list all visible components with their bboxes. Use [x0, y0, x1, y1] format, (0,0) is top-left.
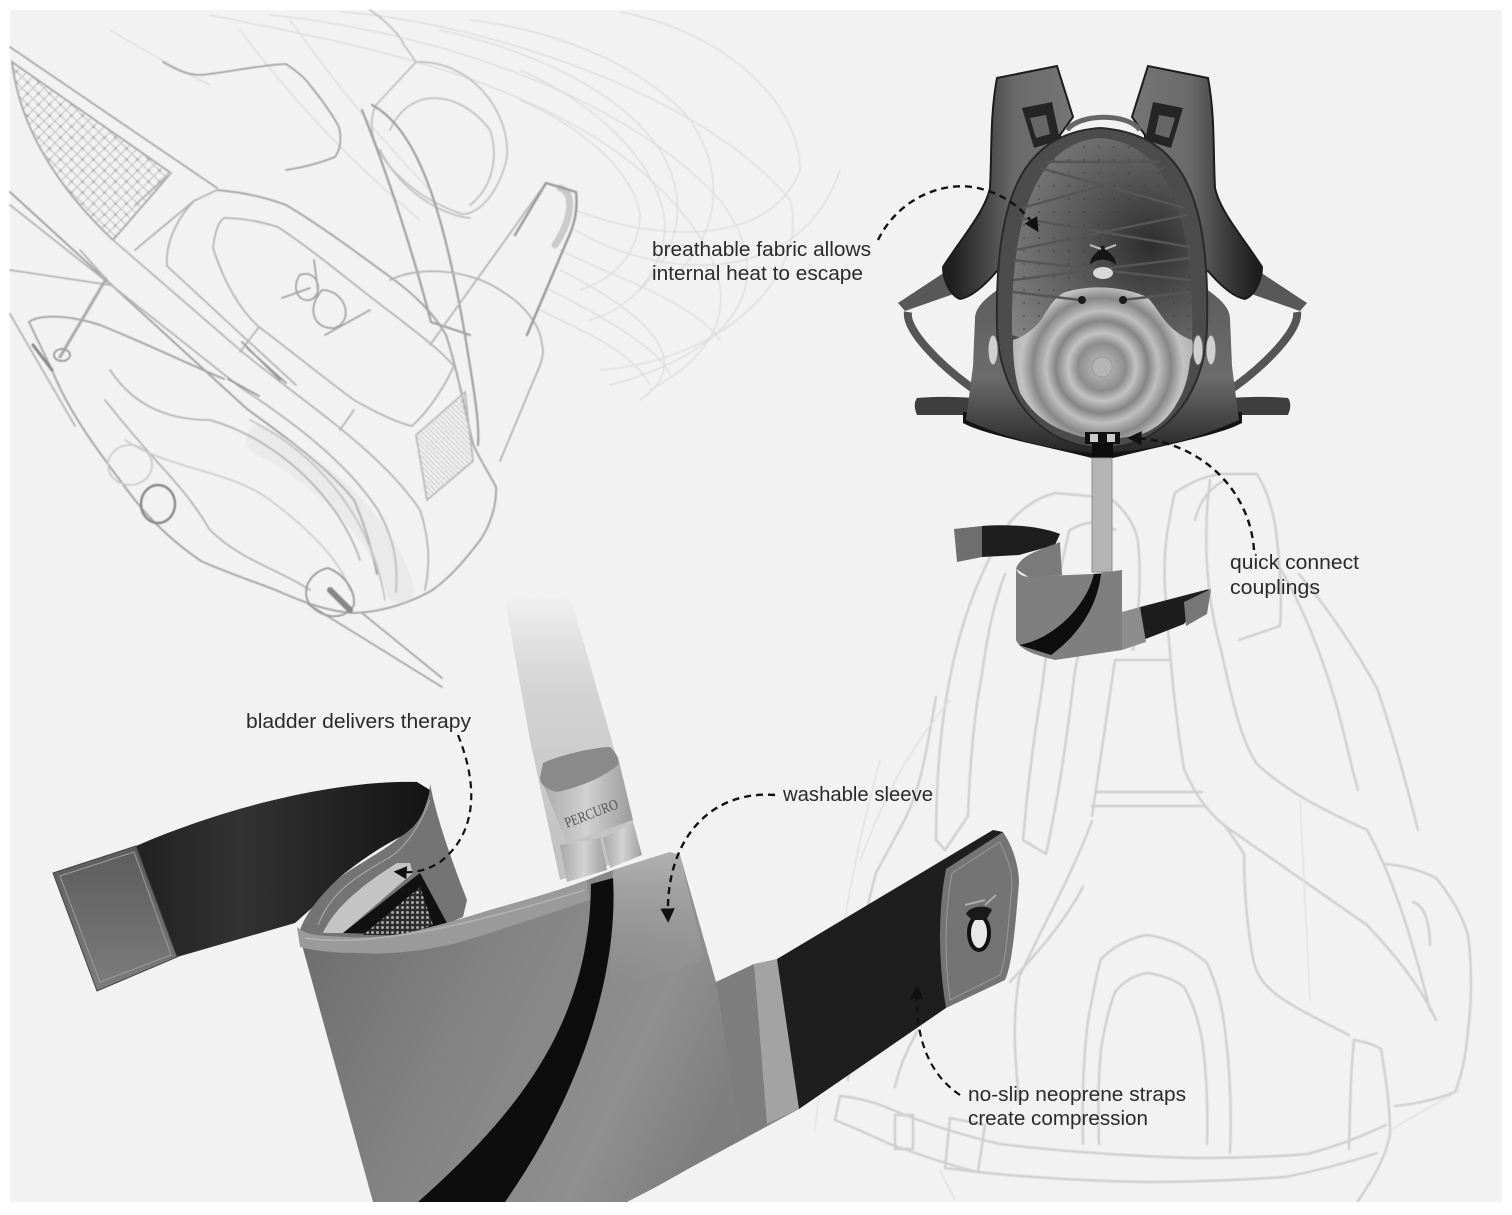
arrow: breathable fabric: [878, 186, 1036, 240]
ripple hub: [1092, 357, 1112, 377]
sleeve front panel: [297, 852, 799, 1202]
label: straps: no-slip neoprene straps: [968, 1084, 1186, 1106]
label: sleeve: washable sleeve: [782, 784, 933, 806]
neoprene strap: [777, 830, 1003, 1109]
ripple bladder disc: [1013, 287, 1193, 439]
label: breathable fabric: breathable fabric allows: [652, 239, 871, 261]
bladder frame: [343, 873, 447, 935]
small sleeve back strap: [982, 525, 1060, 557]
label: couplings: couplings: [1230, 577, 1320, 599]
backpack logo: [1090, 245, 1116, 279]
lower tube forks: [560, 823, 642, 882]
extension panel: [627, 964, 767, 1202]
product: large sleeve: [53, 595, 1019, 1202]
callout: breathable fabric: [652, 186, 1036, 285]
callout: quick connect couplings: [1132, 438, 1359, 599]
arrow: couplings: [1132, 438, 1254, 550]
breathable mesh panel: [1012, 138, 1192, 350]
arrow: sleeve: [668, 795, 775, 918]
zipper pulls: [988, 335, 1216, 365]
strap end patch: [53, 846, 177, 991]
bladder pad: [323, 863, 413, 933]
cap stitching: [946, 842, 1012, 1000]
pack base lip: [963, 412, 1242, 458]
sketch: straps crossing: [362, 110, 470, 335]
strap logo: [965, 895, 996, 950]
small sleeve band: [1019, 574, 1101, 655]
clip opening: [540, 747, 619, 792]
sketch: knob: [141, 485, 175, 523]
sketch: lower clip: [306, 568, 354, 616]
sketch: top panel: [167, 190, 296, 385]
sketch: clips: [60, 279, 106, 357]
product: backpack: [898, 66, 1307, 458]
cord ends: [1078, 296, 1127, 304]
lacing cords: [1013, 162, 1190, 300]
sketch: lower wheel contours: [110, 370, 360, 560]
tube clip: [540, 757, 633, 843]
sketch: hatching: [260, 440, 400, 590]
back strap: [53, 782, 430, 991]
small sleeve inner: [1016, 542, 1062, 578]
rim seam: [305, 890, 585, 940]
strap stitching: [318, 800, 430, 925]
small connecting tube: [1092, 458, 1112, 572]
small sleeve right strap: [1140, 589, 1209, 640]
left shoulder strap and wing: [898, 66, 1073, 415]
callout: neoprene straps: [917, 990, 1186, 1130]
black diagonal band: [418, 878, 614, 1202]
label: breathable fabric: internal heat to escape: [652, 263, 863, 285]
carry handle: [1067, 117, 1140, 130]
sketch motion lines: [110, 12, 840, 400]
sleeve top-right glow: [610, 852, 705, 990]
sketch: bag detail: [10, 10, 840, 687]
pack body: [966, 283, 1239, 453]
sketch: large backpack outline: [815, 474, 1471, 1201]
back frame: [997, 128, 1207, 448]
callout: bladder: [246, 711, 471, 872]
right shoulder strap and wing: [1132, 66, 1307, 415]
callout: washable sleeve: [668, 784, 933, 918]
sketch: curved band: [515, 183, 577, 335]
strap inner grey side: [300, 783, 467, 945]
bladder mesh: [363, 887, 433, 935]
vertical tube: [505, 595, 642, 882]
sketch: logo: [282, 260, 370, 335]
light strip: [754, 959, 799, 1124]
brand name: PERCURO: [563, 797, 621, 832]
small sleeve body: [1016, 569, 1122, 660]
product: small sleeve: [954, 525, 1211, 660]
quick connect couplings: [1085, 432, 1120, 458]
label: straps: create compression: [968, 1108, 1148, 1130]
label: bladder: bladder delivers therapy: [246, 711, 471, 733]
sketch: cylinder: [370, 10, 507, 218]
sketch: mesh panel: [12, 62, 171, 240]
strap end cap: [940, 832, 1019, 1008]
sleeve rim: [297, 880, 590, 954]
sketch: shell outline: [29, 190, 496, 613]
label: couplings: quick connect: [1230, 552, 1359, 574]
sketch: long strap lines: [10, 192, 377, 574]
arrow: bladder: [398, 735, 471, 872]
arrow: straps: [917, 990, 960, 1095]
